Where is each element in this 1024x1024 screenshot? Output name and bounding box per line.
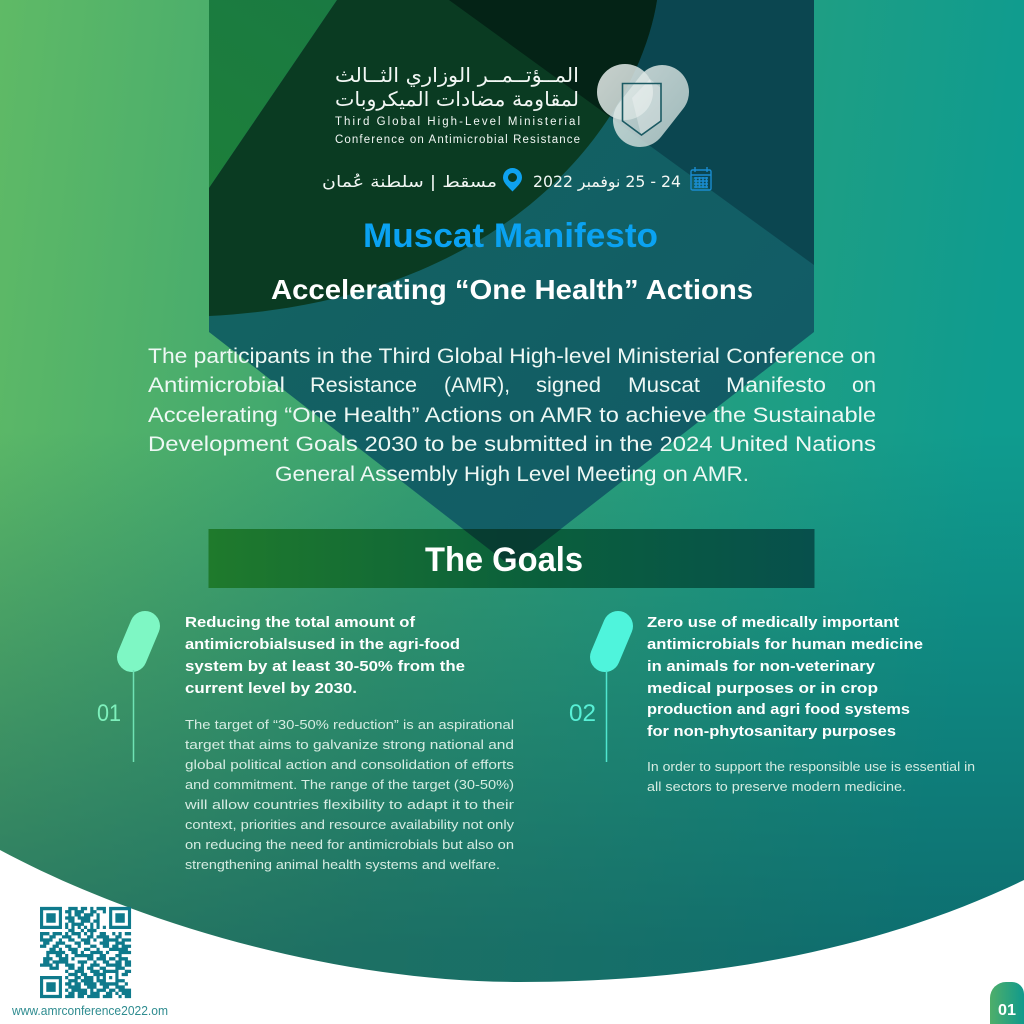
goal 1 heading: system by at least 30-50% from the bbox=[185, 659, 465, 675]
goals heading bar bbox=[208, 529, 814, 588]
intro paragraph: Development Goals 2030 to be submitted in the 2024 United Nations bbox=[148, 432, 876, 456]
goal 1 marker bbox=[97, 626, 145, 762]
goal 2 body text bbox=[647, 759, 975, 794]
intro paragraph: Resistance bbox=[310, 373, 417, 397]
goal 1 body text: context, priorities and resource availability not only bbox=[185, 817, 515, 832]
goals heading bar: The Goals bbox=[425, 541, 583, 579]
goal 2 heading: medical purposes or in crop bbox=[647, 681, 878, 697]
goal 1 body text: will allow countries flexibility to adapt it to their bbox=[184, 797, 515, 812]
english conference title: Third Global High-Level Ministerial bbox=[335, 116, 580, 128]
intro paragraph: General Assembly High Level Meeting on AMR. bbox=[275, 462, 749, 486]
goal 2 body text: In order to support the responsible use is essential in bbox=[647, 759, 975, 774]
goal 1 heading: current level by 2030. bbox=[185, 681, 357, 697]
title: Muscat Manifesto: Muscat Manifesto bbox=[363, 217, 658, 255]
intro paragraph: (AMR), bbox=[444, 373, 510, 397]
goal 1 body text: strengthening animal health systems and welfare. bbox=[185, 857, 500, 872]
goal 2 marker: 02 bbox=[569, 700, 596, 727]
goal 2 heading: production and agri food systems bbox=[647, 702, 910, 718]
goal 2 heading: in animals for non-veterinary bbox=[647, 659, 875, 675]
website URL: www.amrconference2022.om bbox=[11, 1004, 168, 1018]
goal 1 body text: on reducing the need for antimicrobials but also on bbox=[185, 837, 514, 852]
goal 1 body text: and commitment. The range of the target (30-50%) bbox=[185, 777, 514, 792]
intro paragraph: on bbox=[852, 373, 876, 397]
goal 2 marker bbox=[569, 626, 618, 762]
goal 1 heading bbox=[185, 615, 465, 697]
goal 1 heading: antimicrobialsused in the agri-food bbox=[185, 637, 460, 653]
date text: 24 - 25 نوفمبر 2022 bbox=[533, 172, 681, 192]
subtitle: Accelerating “One Health” Actions bbox=[271, 274, 753, 305]
goal 1 heading: Reducing the total amount of bbox=[185, 615, 415, 631]
intro paragraph: Antimicrobial bbox=[148, 373, 285, 397]
icon: location pin bbox=[503, 168, 522, 192]
intro paragraph: signed bbox=[536, 373, 601, 397]
intro paragraph: Manifesto bbox=[726, 373, 826, 397]
central hexagon panel bbox=[209, 0, 814, 570]
page number badge bbox=[990, 982, 1024, 1024]
QR code bbox=[40, 909, 131, 996]
intro paragraph: The participants in the Third Global High-level Ministerial Conference on bbox=[148, 344, 876, 368]
intro paragraph bbox=[148, 344, 876, 486]
page number badge: 01 bbox=[998, 1002, 1016, 1019]
goal 1 body text: The target of “30-50% reduction” is an aspirational bbox=[185, 717, 514, 732]
goal 2 heading bbox=[647, 615, 923, 740]
intro paragraph: Accelerating “One Health” Actions on AMR to achieve the Sustainable bbox=[148, 403, 876, 427]
goal 1 marker: 01 bbox=[97, 700, 121, 727]
arabic conference title bbox=[335, 63, 579, 111]
conference logo bbox=[597, 64, 662, 135]
english conference title: Conference on Antimicrobial Resistance bbox=[335, 134, 580, 146]
location text: مسقط | سلطنة عُمان bbox=[322, 172, 497, 191]
goal 1 body text: global political action and consolidation of efforts bbox=[185, 757, 515, 772]
goal 1 body text: target that aims to galvanize strong national and bbox=[185, 737, 514, 752]
intro paragraph: Muscat bbox=[628, 373, 700, 397]
icon: calendar bbox=[691, 167, 711, 190]
goal 2 heading: Zero use of medically important bbox=[647, 615, 899, 631]
arabic conference title: المــؤتــمــر الوزاري الثــالث bbox=[335, 63, 579, 88]
english conference title bbox=[335, 116, 580, 146]
goal 2 body text: all sectors to preserve modern medicine. bbox=[647, 779, 906, 794]
goal 2 heading: for non-phytosanitary purposes bbox=[647, 724, 896, 740]
goal 2 heading: antimicrobials for human medicine bbox=[647, 637, 923, 653]
arabic conference title: لمقاومة مضادات الميكروبات bbox=[335, 87, 579, 111]
white bottom curve bbox=[0, 850, 1024, 1024]
goal 1 body text bbox=[184, 717, 515, 872]
